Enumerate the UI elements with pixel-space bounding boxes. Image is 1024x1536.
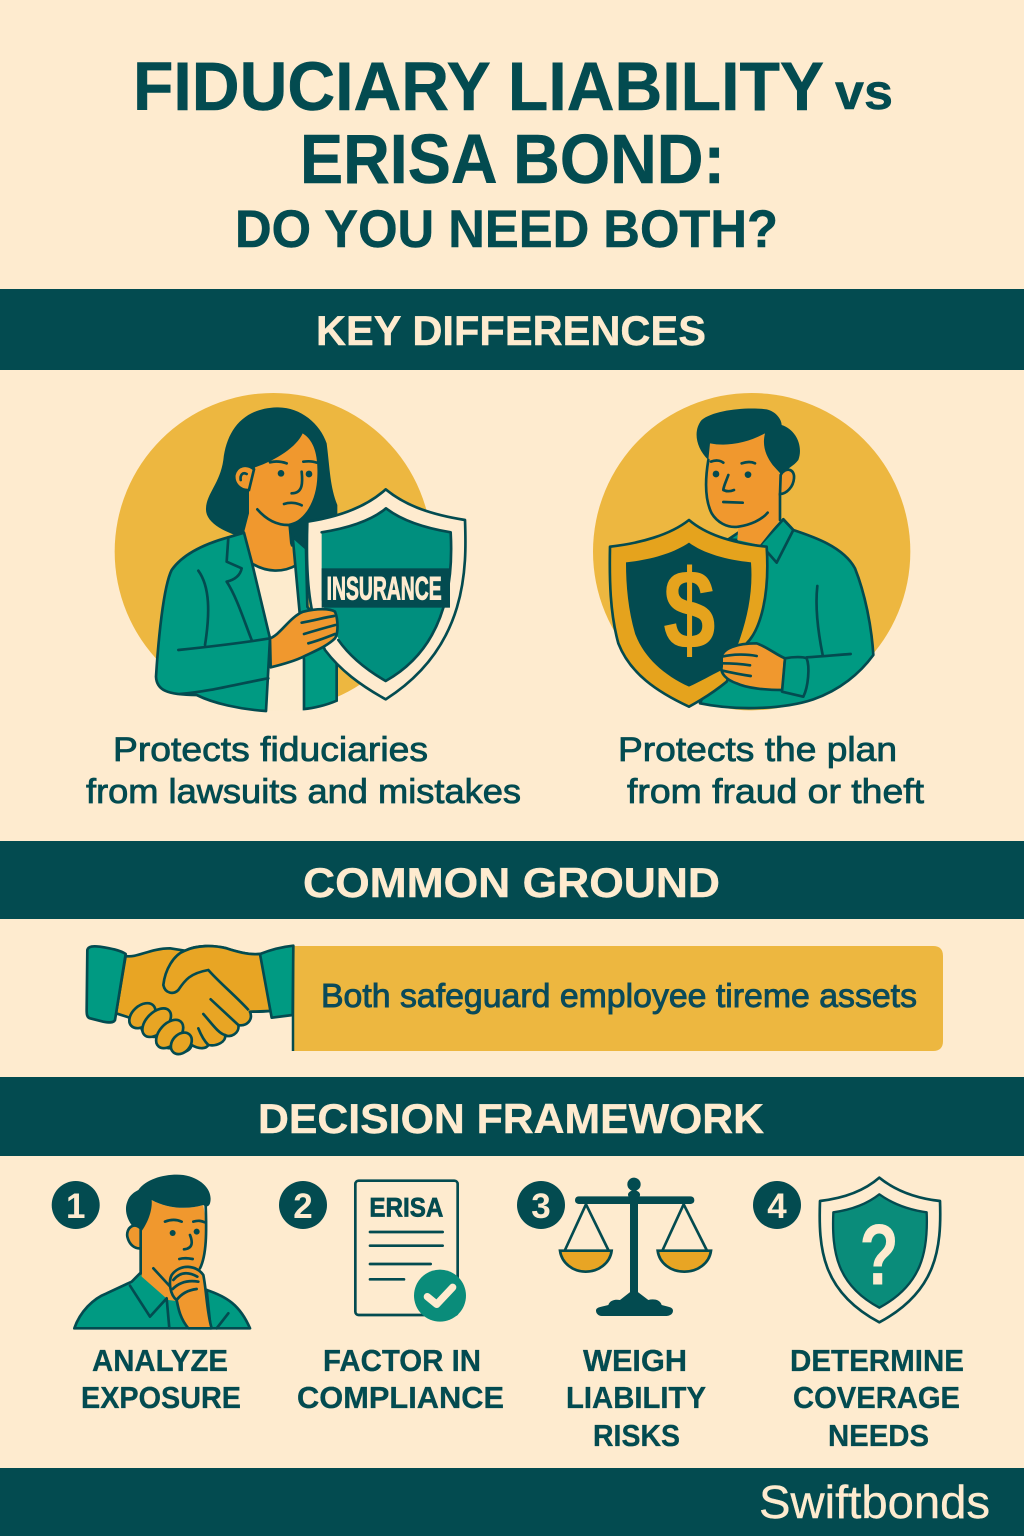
footer bar with brand xyxy=(0,1468,1024,1536)
label: weigh liability risks: LIABILITY xyxy=(566,1380,706,1415)
icon: thinking man xyxy=(74,1175,250,1328)
step 2: factor in compliance xyxy=(279,1181,504,1415)
footer bar with brand: Swiftbonds xyxy=(759,1476,990,1528)
label: weigh liability risks: WEIGH xyxy=(583,1343,687,1378)
title xyxy=(133,48,893,259)
section banner: common ground xyxy=(0,841,1024,919)
label: analyze exposure xyxy=(81,1343,241,1415)
caption: ERISA bond xyxy=(618,731,925,811)
step number 1: 1 xyxy=(66,1187,85,1226)
title: DO YOU NEED BOTH? xyxy=(235,200,778,259)
label: factor in compliance: COMPLIANCE xyxy=(297,1380,504,1415)
step number 4: 4 xyxy=(767,1187,787,1226)
step 4: determine coverage needs xyxy=(753,1178,964,1453)
dollar shield: $ xyxy=(663,547,716,674)
icon: balance scale xyxy=(560,1178,711,1316)
common ground callout: Both safeguard employee tireme assets xyxy=(321,977,917,1014)
caption: fiduciary liability: Protects fiduciaries xyxy=(113,731,428,769)
illustration: woman holding insurance shield xyxy=(115,393,465,711)
section banner: decision framework: DECISION FRAMEWORK xyxy=(258,1095,764,1142)
icon: question shield xyxy=(820,1178,940,1322)
step number 3 xyxy=(517,1181,565,1229)
step number 2 xyxy=(279,1181,327,1229)
label: determine coverage needs: COVERAGE xyxy=(793,1380,960,1415)
label: analyze exposure: EXPOSURE xyxy=(81,1380,241,1415)
title: FIDUCIARY LIABILITY xyxy=(133,48,824,125)
icon: handshake xyxy=(87,946,293,1058)
step number 3: 3 xyxy=(531,1187,551,1226)
label: weigh liability risks xyxy=(566,1343,706,1453)
label: factor in compliance xyxy=(297,1343,504,1415)
caption: fiduciary liability: from lawsuits and mistakes xyxy=(86,773,521,811)
section banner: key differences xyxy=(0,289,1024,370)
section banner: common ground: COMMON GROUND xyxy=(303,859,720,906)
label: weigh liability risks: RISKS xyxy=(593,1418,680,1453)
caption: ERISA bond: from fraud or theft xyxy=(627,773,925,811)
caption: fiduciary liability xyxy=(86,731,521,811)
icon: question shield: ? xyxy=(859,1207,899,1303)
step 3: weigh liability risks xyxy=(517,1178,711,1453)
step number 1 xyxy=(52,1181,100,1229)
label: determine coverage needs: DETERMINE xyxy=(790,1343,964,1378)
title: vs xyxy=(835,64,893,120)
section banner: decision framework xyxy=(0,1077,1024,1156)
illustration: man holding dollar shield xyxy=(593,393,910,710)
step number 4 xyxy=(753,1181,801,1229)
caption: ERISA bond: Protects the plan xyxy=(618,731,897,769)
insurance shield xyxy=(307,489,465,699)
step number 2: 2 xyxy=(293,1187,313,1226)
common ground callout xyxy=(293,946,943,1051)
label: determine coverage needs xyxy=(790,1343,964,1453)
dollar shield xyxy=(610,520,767,707)
section banner: key differences: KEY DIFFERENCES xyxy=(316,307,706,354)
insurance shield: INSURANCE xyxy=(327,570,442,606)
title: ERISA BOND: xyxy=(300,120,725,198)
label: analyze exposure: ANALYZE xyxy=(92,1343,228,1378)
label: determine coverage needs: NEEDS xyxy=(828,1418,929,1453)
label: factor in compliance: FACTOR IN xyxy=(323,1343,481,1378)
icon: ERISA document with check: ERISA xyxy=(369,1193,443,1223)
step 1: analyze exposure xyxy=(52,1175,250,1415)
icon: ERISA document with check xyxy=(355,1181,466,1322)
